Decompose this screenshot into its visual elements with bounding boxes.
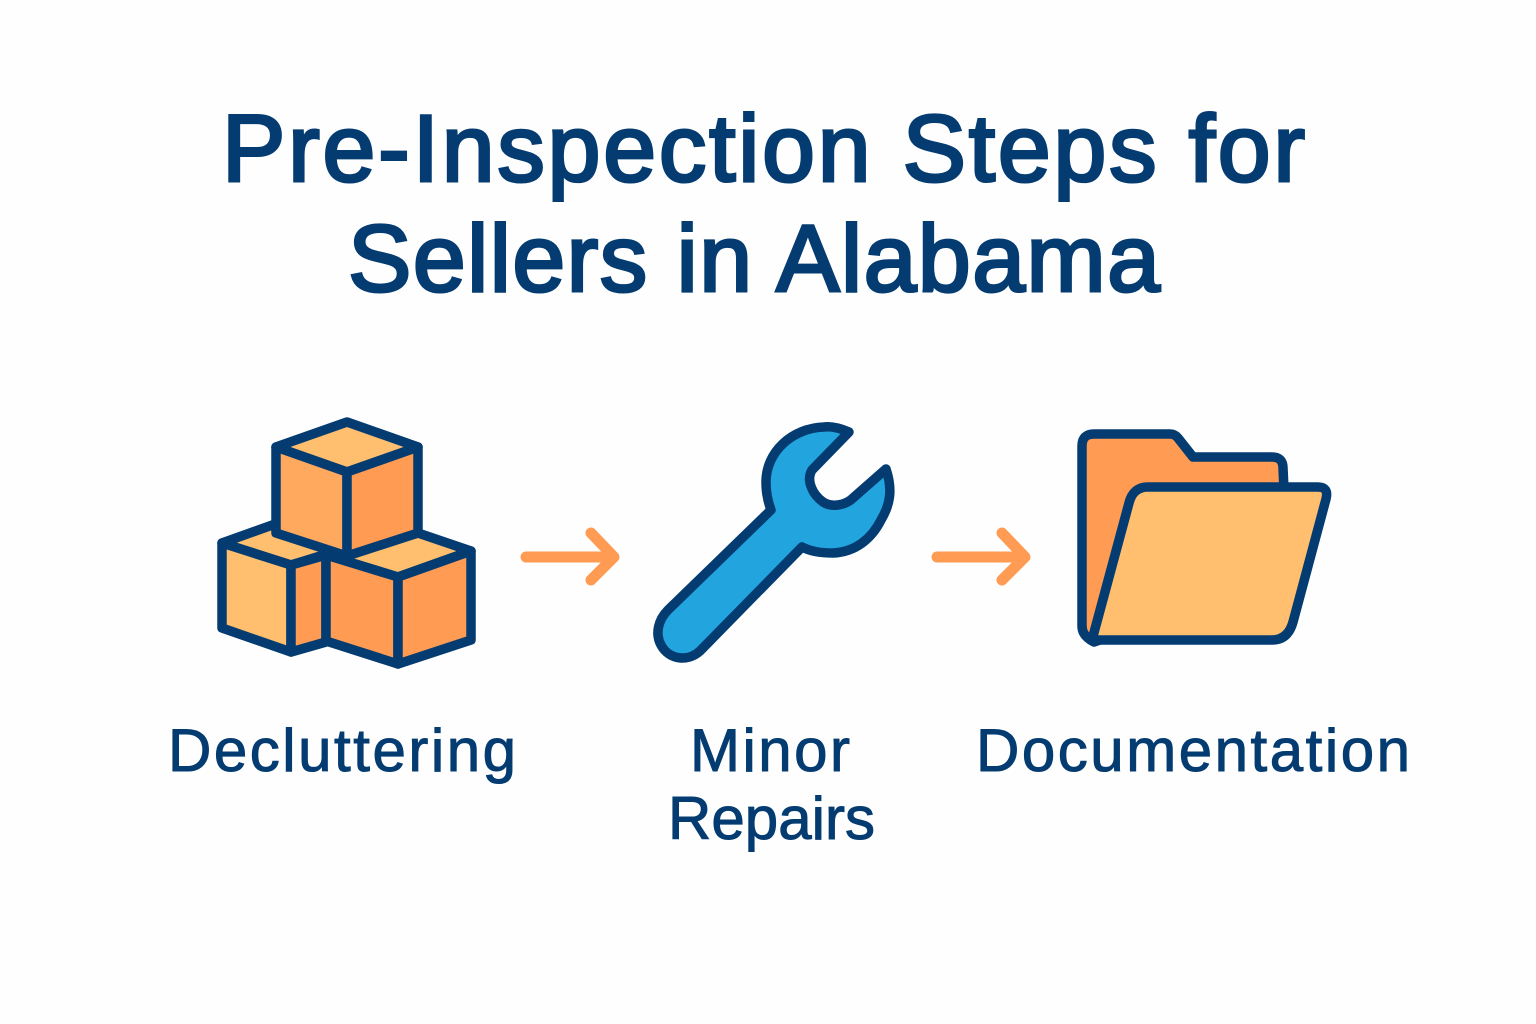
right box	[326, 533, 471, 664]
label: Documentation: Documentation	[976, 717, 1410, 784]
title	[222, 96, 1305, 312]
label: Minor Repairs: Minor	[690, 717, 850, 784]
folder back	[1082, 434, 1284, 642]
icon: wrench	[658, 427, 890, 658]
title: Pre-Inspection Steps for	[222, 96, 1305, 202]
folder front	[1092, 487, 1327, 640]
label: Decluttering: Decluttering	[168, 717, 516, 784]
icon: folder	[1082, 434, 1327, 642]
top box	[276, 422, 418, 556]
title: Sellers in Alabama	[348, 206, 1160, 312]
icon: stacked boxes	[222, 422, 471, 664]
label: Minor Repairs	[668, 717, 875, 852]
arrow: step 2 to step 3	[937, 533, 1025, 580]
label: Minor Repairs: Repairs	[668, 785, 875, 852]
arrow: step 1 to step 2	[526, 533, 614, 580]
left box	[222, 518, 362, 652]
